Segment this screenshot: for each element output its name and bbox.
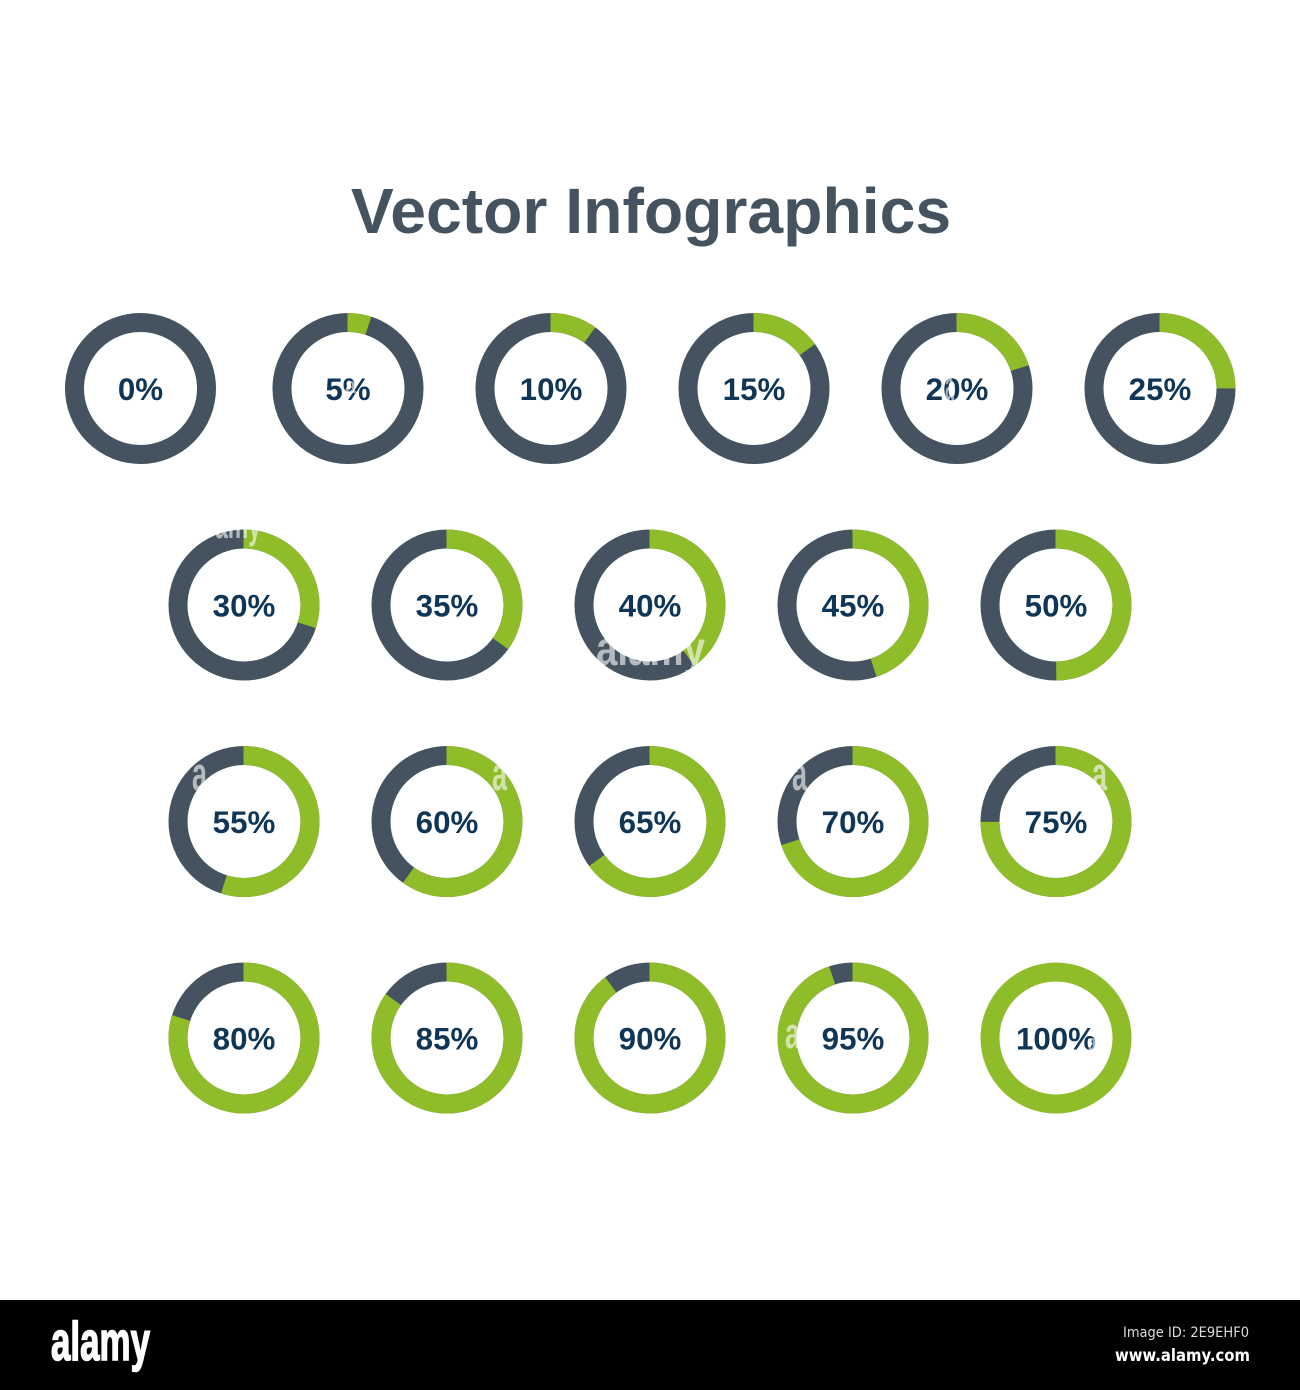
ring: 0%: 0% <box>118 372 163 407</box>
ring: 50% <box>990 539 1122 671</box>
ring: 80% <box>178 972 310 1104</box>
ring: 35% <box>381 539 513 671</box>
ring: 45% <box>787 539 919 671</box>
ring: 55% <box>178 756 310 888</box>
ring: 0% <box>74 322 206 454</box>
ring: 40% <box>584 539 716 671</box>
ring: 80%: 80% <box>213 1022 275 1056</box>
watermark fragments: a <box>1088 1030 1096 1055</box>
watermark fragments: a <box>792 747 807 800</box>
ring: 95% <box>787 972 919 1104</box>
ring: 100%: 100% <box>1016 1022 1096 1056</box>
watermark fragments: a <box>192 747 207 800</box>
ring: 20%: 20% <box>926 372 988 407</box>
watermark fragments <box>192 362 1107 1058</box>
ring: 90% <box>584 972 716 1104</box>
ring: 85%: 85% <box>416 1022 478 1056</box>
ring: 30%: 30% <box>213 588 275 624</box>
ring: 45%: 45% <box>822 588 884 624</box>
ring: 75%: 75% <box>1025 805 1087 840</box>
ring: 25% <box>1094 322 1226 454</box>
ring: 15%: 15% <box>723 372 785 407</box>
ring: 55%: 55% <box>213 805 275 840</box>
ring: 35%: 35% <box>416 588 478 624</box>
ring: 40%: 40% <box>619 588 681 624</box>
title: Vector Infographics <box>351 175 951 247</box>
watermark fragments: a <box>492 747 507 800</box>
ring: 30% <box>178 539 310 671</box>
ring: 85% <box>381 972 513 1104</box>
image id: Image ID: 2E9EHF0 <box>1123 1325 1249 1341</box>
footer logo: alamy <box>51 1310 150 1372</box>
watermark fragments: a <box>785 1009 800 1058</box>
watermark fragments: a <box>345 373 357 398</box>
footer bar <box>0 1300 1300 1390</box>
ring: 65% <box>584 756 716 888</box>
ring: 5%: 5% <box>325 372 371 407</box>
ring: 70%: 70% <box>822 805 884 840</box>
website: www.alamy.com <box>1115 1346 1250 1366</box>
ring: 70% <box>787 756 919 888</box>
ring: 100% <box>990 972 1122 1104</box>
watermark fragments: a <box>945 362 954 409</box>
ring: 60% <box>381 756 513 888</box>
watermark fragments: a <box>1092 747 1107 800</box>
ring: 65%: 65% <box>619 805 681 840</box>
ring: 10% <box>485 322 617 454</box>
ring: 20% <box>891 322 1023 454</box>
ring: 50%: 50% <box>1025 588 1087 624</box>
ring: 95%: 95% <box>822 1022 884 1056</box>
ring: 90%: 90% <box>619 1022 681 1056</box>
ring: 5% <box>282 322 414 454</box>
ring: 75% <box>990 756 1122 888</box>
ring: 25%: 25% <box>1129 372 1191 407</box>
ring: 15% <box>688 322 820 454</box>
watermark fragments: alamy <box>596 623 705 676</box>
ring: 10%: 10% <box>520 372 582 407</box>
watermark fragments: amy <box>215 500 261 547</box>
ring: 60%: 60% <box>416 805 478 840</box>
